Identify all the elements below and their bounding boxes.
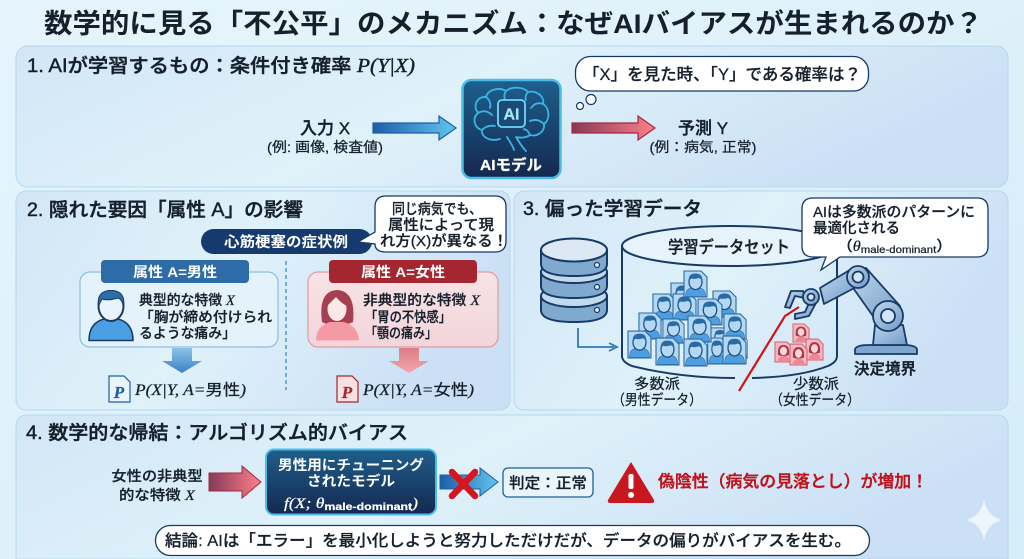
callout: optimized [802, 198, 988, 270]
arrow: input to model [373, 116, 456, 140]
heading: section 3: 3. 偏った学習データ [523, 197, 702, 220]
icon: warning triangle [608, 462, 654, 503]
card: male [80, 260, 278, 347]
label: dataset: 学習データセット [668, 237, 790, 257]
arrow: input to model [209, 466, 261, 498]
label: myocardial infarction pill [201, 229, 372, 254]
callout: optimized: AIは多数派のパターンに [813, 203, 975, 221]
callout: optimized: male-dominant [861, 244, 936, 256]
callout: same disease [358, 196, 508, 252]
text: male typical feature [139, 292, 272, 341]
panel: 3 biased data [514, 191, 1008, 410]
panel: 1 conditional probability [16, 46, 1008, 187]
icon: female person [316, 290, 359, 340]
callout: thought bubble: 「X」を見た時、「Y」である確率は？ [583, 65, 861, 84]
text: female atypical feature input: 女性の非典型 [112, 468, 202, 484]
text: input X [267, 119, 383, 155]
icon: male P document: P [113, 383, 125, 402]
label: minority: （女性データ） [770, 391, 860, 409]
formula: female: P(X|Y, A= 女性) [362, 381, 474, 399]
heading: section 4: 4. 数学的な帰結：アルゴリズム的バイアス [26, 421, 408, 444]
icon: database [541, 238, 607, 322]
panel: 4 algorithmic bias [16, 415, 1008, 559]
heading: section 2: 2. 隠れた要因「属性 A」の影響 [27, 199, 303, 221]
label: male attribute [101, 260, 249, 283]
icon: AI model: AIモデル [480, 156, 542, 174]
arrow: female down [389, 348, 429, 373]
box: verdict [503, 468, 593, 497]
box: tuned model: 男性用にチューニング [278, 457, 424, 473]
box: tuned model: male-dominant [324, 501, 413, 513]
text: false negatives increase: 偽陰性（病気の見落とし）が増加！ [658, 471, 928, 491]
card: female [308, 260, 498, 347]
text: input X: (例: 画像, 検査値) [267, 139, 383, 155]
text: input X: 入力 X [300, 119, 350, 138]
box: tuned model [266, 450, 436, 514]
icon: female P document: P [341, 383, 353, 402]
label: minority [770, 376, 860, 409]
text: female atypical feature input [112, 468, 202, 504]
callout: optimized: ） [936, 238, 952, 255]
text: male typical feature: 典型的な特徴 X [139, 292, 236, 309]
callout: same disease: 同じ病気でも、 [392, 201, 482, 218]
text: male typical feature: るような痛み」 [139, 325, 236, 341]
text: female atypical feature: 「顎の痛み」 [365, 325, 437, 341]
text: prediction Y: 予測 Y [678, 119, 728, 138]
icons: male data documents [628, 271, 747, 366]
box: tuned model: f(X; θ [284, 496, 318, 512]
text: prediction Y [650, 119, 756, 155]
icon: robot arm [785, 266, 917, 354]
arrow: database to dataset [578, 328, 617, 351]
label: majority: （男性データ） [612, 391, 702, 409]
callout: thought bubble [576, 56, 868, 110]
text: male typical feature: 「胸が締め付けられ [139, 309, 272, 325]
text: prediction Y: (例：病気, 正常) [650, 139, 756, 155]
dataset cylinder [622, 226, 838, 378]
title: 数学的に見る「不公平」のメカニズム：なぜAIバイアスが生まれるのか？ [44, 8, 983, 39]
label: majority [612, 375, 702, 409]
arrow: model to prediction [572, 116, 655, 140]
text: female atypical feature: 非典型的な特徴 X [363, 292, 481, 309]
conclusion [156, 526, 870, 556]
label: myocardial infarction pill: 心筋梗塞の症状例 [224, 233, 348, 251]
heading: section 1: 1. AIが学習するもの：条件付き確率 P(Y|X) [27, 55, 415, 77]
text: female atypical feature [363, 292, 481, 341]
callout: same disease: れ方(X)が異なる！ [380, 232, 508, 250]
text: female atypical feature: 「胃の不快感」 [365, 309, 451, 325]
label: decision boundary: 決定境界 [854, 360, 916, 378]
icon: male P document [109, 376, 130, 402]
panel: 2 hidden attribute [16, 191, 510, 410]
label: male attribute: 属性 A=男性 [133, 264, 217, 280]
conclusion: 結論: AIは「エラー」を最小化しようと努力しただけだが、データの偏りがバイアスを生む。 [165, 531, 851, 550]
box: verdict: 判定：正常 [509, 475, 587, 492]
arrow: blocked output [440, 468, 498, 496]
formula: male: P(X|Y, A= 男性) [134, 381, 246, 399]
label: female attribute [329, 260, 477, 283]
label: minority: 少数派 [793, 376, 840, 393]
callout: same disease: 属性によって現 [388, 217, 495, 234]
icon: male person [89, 290, 133, 340]
arrow: male down [162, 348, 202, 373]
callout: optimized: 最適化される [813, 219, 900, 237]
icons: female data documents [775, 324, 823, 365]
label: majority: 多数派 [634, 375, 681, 393]
callout: optimized: （θ [837, 239, 860, 255]
icon: AI model: AI [504, 106, 520, 124]
icon: sparkle [966, 500, 1002, 540]
decision boundary line [739, 307, 799, 391]
icon: AI model [462, 80, 560, 178]
text: female atypical feature input: 的な特徴 X [119, 487, 196, 504]
box: tuned model: ) [411, 496, 418, 512]
icon: red cross [452, 472, 475, 496]
box: tuned model: されたモデル [307, 473, 395, 489]
icon: female P document [337, 376, 358, 402]
label: female attribute: 属性 A=女性 [361, 264, 445, 280]
